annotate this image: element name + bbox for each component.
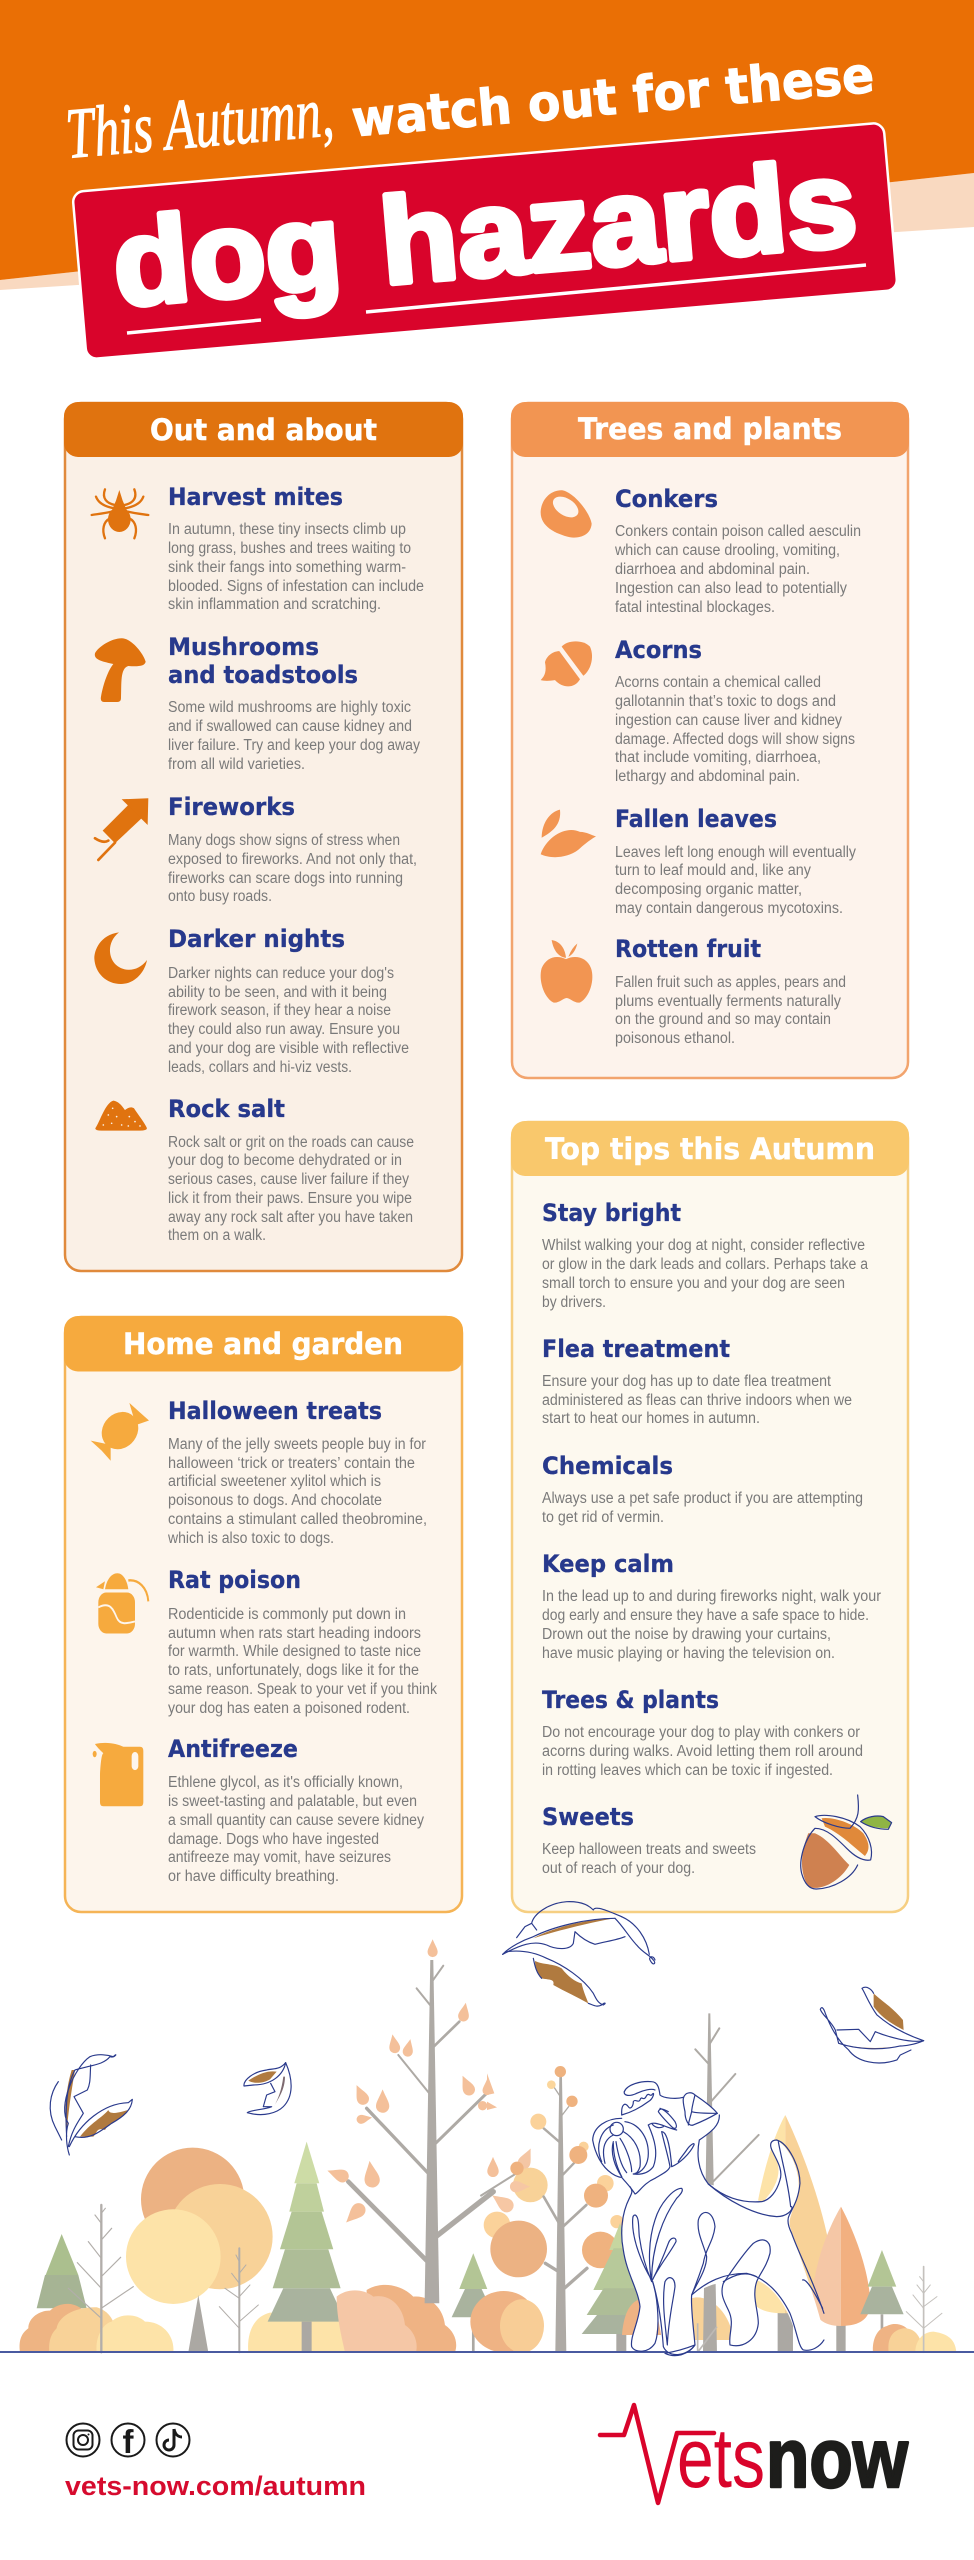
falling leaf: large top [503, 1902, 655, 2006]
body text: Rat poison: same reason. Speak to your vet if you think [168, 1681, 437, 1698]
tip: Chemicals [542, 1452, 863, 1526]
body text: Darker nights: firework season, if they hear a noise [168, 1002, 391, 1019]
body text: Halloween treats: Many of the jelly sweets people buy in for [168, 1436, 426, 1453]
banner: dog hazards: hazards [375, 134, 862, 310]
body text: Rat poison: your dog has eaten a poisoned rodent. [168, 1700, 410, 1717]
body text: Fallen leaves: Leaves left long enough will eventually [615, 844, 856, 861]
round tree [126, 2148, 273, 2352]
heading: Fireworks: Fireworks [168, 793, 295, 821]
body text: Darker nights: leads, collars and hi-viz vests. [168, 1059, 352, 1076]
logo: Vets Now: ets [677, 2411, 765, 2505]
right pine tree [860, 2250, 904, 2352]
body text: Darker nights [168, 965, 409, 1076]
tip: Keep calm: Drown out the noise by drawing your curtains, [542, 1626, 831, 1643]
heading: Rotten fruit: Rotten fruit [615, 935, 761, 963]
icon: tiktok [156, 2424, 190, 2456]
panel heading: Out and about: Out and about [150, 413, 377, 447]
icon: mushroom [95, 638, 146, 702]
icon: firework rocket [95, 798, 148, 860]
body text: Fallen leaves: may contain dangerous mycotoxins. [615, 900, 843, 917]
body text: Rotten fruit: Fallen fruit such as apples, pears and [615, 974, 846, 991]
yellow tree [750, 2115, 834, 2352]
far-left pine tree [37, 2234, 87, 2308]
body text: Rock salt: your dog to become dehydrated or in [168, 1152, 402, 1169]
body text: Fallen leaves: turn to leaf mould and, like any [615, 862, 811, 879]
logo: Vets Now [600, 2405, 909, 2505]
tip: Stay bright [542, 1199, 868, 1311]
body text: Rock salt: them on a walk. [168, 1227, 266, 1244]
item: Mushrooms and toadstools [95, 633, 420, 773]
body text: Halloween treats: artificial sweetener xylitol which is [168, 1473, 381, 1490]
right bushes [873, 2324, 956, 2352]
orange tree [812, 2207, 870, 2352]
yellow bush [248, 2313, 354, 2352]
falling leaf: small [244, 2063, 291, 2115]
tip: Trees & plants [542, 1686, 863, 1779]
body text: Mushrooms: and if swallowed can cause kidney and [168, 718, 412, 735]
footer [65, 2405, 909, 2505]
orange bush with peach bush [470, 2291, 544, 2353]
icon: antifreeze bottle [93, 1743, 143, 1806]
tip: Stay bright: or glow in the dark leads and collars. Perhaps take a [542, 1256, 868, 1273]
body text: Fallen leaves [615, 844, 856, 917]
tip: Keep calm: In the lead up to and during fireworks night, walk your [542, 1588, 881, 1605]
body text: Acorns: ingestion can cause liver and kidney [615, 712, 842, 729]
body text: Fireworks [168, 832, 417, 905]
tip: Flea treatment: Ensure your dog has up to date flea treatment [542, 1373, 832, 1390]
small pine tree [452, 2253, 495, 2352]
body text: Rat poison [168, 1606, 437, 1717]
website url: vets-now.com/autumn [65, 2471, 366, 2501]
body text: Acorns: gallotannin that’s toxic to dogs and [615, 693, 836, 710]
item: Acorns [541, 636, 855, 785]
body text: Rock salt: lick it from their paws. Ensure you wipe [168, 1190, 412, 1207]
heading: Acorns: Acorns [615, 636, 702, 664]
body text: Darker nights: Darker nights can reduce your dog's [168, 965, 394, 982]
tip: Sweets [542, 1803, 756, 1877]
panel heading: Home and garden: Home and garden [123, 1327, 403, 1361]
body text: Conkers: fatal intestinal blockages. [615, 599, 775, 616]
body text: Conkers: diarrhoea and abdominal pain. [615, 561, 810, 578]
body text: Fallen leaves: decomposing organic matter, [615, 881, 802, 898]
item: Rat poison [96, 1566, 437, 1717]
body text: Darker nights: they could also run away. Ensure you [168, 1021, 400, 1038]
item: Rock salt [95, 1095, 414, 1244]
body text: Rotten fruit: plums eventually ferments naturally [615, 993, 841, 1010]
body text: Antifreeze: Ethlene glycol, as it's officially known, [168, 1774, 403, 1791]
body text: Rotten fruit [615, 974, 846, 1047]
body text: Rotten fruit: poisonous ethanol. [615, 1030, 735, 1047]
body text: Harvest mites: In autumn, these tiny insects climb up [168, 521, 406, 538]
body text: Harvest mites: sink their fangs into something warm- [168, 559, 406, 576]
left bushes [20, 2304, 173, 2352]
item: Rotten fruit [541, 935, 846, 1047]
panel heading: Trees and plants: Trees and plants [578, 412, 842, 446]
body text: Rock salt: away any rock salt after you have taken [168, 1209, 413, 1226]
title line: This Autumn, watch out for these: watch out for these [349, 46, 876, 149]
tip: Stay bright: small torch to ensure you and your dog are seen [542, 1275, 845, 1292]
falling leaf: far left [50, 2055, 132, 2155]
icon: rock salt pile [95, 1101, 147, 1131]
body text: Harvest mites: skin inflammation and scratching. [168, 596, 381, 613]
leaves and fruit on branch [480, 2073, 548, 2277]
title line: This Autumn, watch out for these: This Autumn, [63, 71, 336, 174]
tip: Keep calm: Keep calm [542, 1550, 674, 1578]
tip: Trees & plants: in rotting leaves which can be toxic if ingested. [542, 1762, 833, 1779]
tall pine tree [268, 2142, 346, 2352]
far-right bare tree [906, 2267, 942, 2352]
body text: Rat poison: for warmth. While designed to taste nice [168, 1643, 421, 1660]
icon: crescent moon [94, 932, 147, 984]
body text: Mushrooms: liver failure. Try and keep your dog away [168, 737, 420, 754]
ground line [0, 2351, 974, 2353]
body text: Conkers: Conkers contain poison called aesculin [615, 523, 861, 540]
body text: Acorns: damage. Affected dogs will show signs [615, 731, 855, 748]
body text: Mushrooms [168, 699, 420, 773]
body text: Antifreeze: is sweet-tasting and palatable, but even [168, 1793, 417, 1810]
centre and right trees [470, 2013, 956, 2353]
banner: dog hazards [72, 123, 898, 359]
body text: Conkers [614, 523, 861, 616]
icon: apple [541, 940, 592, 1003]
item: Halloween treats [91, 1397, 427, 1547]
body text: Halloween treats: which is also toxic to dogs. [167, 1530, 334, 1547]
body text: Halloween treats [167, 1436, 427, 1547]
tip: Trees & plants: acorns during walks. Avoid letting them roll around [542, 1743, 863, 1760]
logo: Vets Now: now [766, 2411, 909, 2505]
left trees and bushes [20, 1939, 495, 2352]
tip: Keep calm: have music playing or having the television on. [542, 1645, 835, 1662]
body text: Mushrooms: from all wild varieties. [168, 756, 305, 773]
big bare tree with leaves [325, 1939, 493, 2303]
tip: Keep calm: dog early and ensure they have a safe space to hide. [542, 1607, 869, 1624]
body text: Rat poison: autumn when rats start heading indoors [168, 1625, 421, 1642]
body text: Antifreeze: antifreeze may vomit, have seizures [168, 1849, 391, 1866]
heading: Fallen leaves: Fallen leaves [615, 805, 777, 833]
body text: Antifreeze: or have difficulty breathing. [168, 1868, 339, 1885]
body text: Halloween treats: poisonous to dogs. And chocolate [168, 1492, 382, 1509]
tip: Flea treatment: administered as fleas can thrive indoors when we [542, 1392, 852, 1409]
item: Fallen leaves [541, 805, 856, 917]
title [63, 25, 898, 359]
body text: Rock salt: serious cases, cause liver failure if they [168, 1171, 409, 1188]
item: Conkers [541, 485, 861, 616]
body text: Rotten fruit: on the ground and so may contain [615, 1011, 831, 1028]
body text: Harvest mites [168, 521, 424, 613]
icon: acorn [541, 641, 592, 686]
body text: Rat poison: Rodenticide is commonly put down in [168, 1606, 406, 1623]
body text: Antifreeze [168, 1774, 424, 1885]
heading: Antifreeze: Antifreeze [168, 1735, 298, 1763]
heading: Harvest mites: Harvest mites [168, 483, 343, 511]
tip: Stay bright: Stay bright [542, 1199, 681, 1227]
body text: Rock salt [168, 1134, 414, 1244]
icon: harvest mite [92, 489, 148, 538]
body text: Rat poison: to rats, unfortunately, dogs like it for the [168, 1662, 419, 1679]
tip: Flea treatment [542, 1335, 852, 1427]
heading: Rock salt: Rock salt [168, 1095, 285, 1123]
body text: Harvest mites: long grass, bushes and trees waiting to [168, 540, 411, 557]
body text: Antifreeze: a small quantity can cause severe kidney [168, 1812, 424, 1829]
body text: Harvest mites: blooded. Signs of infestation can include [168, 578, 424, 595]
body text: Acorns: lethargy and abdominal pain. [615, 768, 800, 785]
panel: Trees and plants [511, 402, 909, 1078]
tip: Sweets: out of reach of your dog. [542, 1860, 695, 1877]
body text: Acorns: Acorns contain a chemical called [615, 674, 821, 691]
icon: instagram [66, 2424, 100, 2456]
tip: Flea treatment: start to heat our homes in autumn. [542, 1410, 760, 1427]
body text: Darker nights: ability to be seen, and with it being [168, 984, 387, 1001]
item: Harvest mites [92, 483, 424, 613]
centre bare tree with round fruit [530, 2066, 624, 2352]
heading: Conkers: Conkers [615, 485, 718, 513]
tip: Stay bright: Whilst walking your dog at night, consider reflective [542, 1237, 865, 1254]
body text: Mushrooms: Some wild mushrooms are highly toxic [168, 699, 411, 716]
body text: Acorns: that include vomiting, diarrhoea, [615, 749, 821, 766]
falling leaf: right [820, 1987, 924, 2063]
body text: Conkers: Ingestion can also lead to potentially [615, 580, 847, 597]
tip: Trees & plants: Trees & plants [542, 1686, 719, 1714]
body text: Fireworks: exposed to fireworks. And not only that, [168, 851, 417, 868]
item: Darker nights [94, 925, 409, 1076]
body text: Darker nights: and your dog are visible with reflective [168, 1040, 409, 1057]
heading: Mushrooms and toadstools: Mushrooms [168, 633, 319, 661]
large orange bush [337, 2285, 456, 2352]
item: Fireworks [95, 793, 417, 905]
heading: Mushrooms and toadstools: and toadstools [168, 661, 358, 689]
tip: Chemicals: Chemicals [542, 1452, 673, 1480]
header background [0, 0, 974, 290]
body text: Acorns [615, 674, 855, 785]
social icons [66, 2423, 190, 2460]
tip: Stay bright: by drivers. [542, 1294, 606, 1311]
banner: dog hazards: dog [108, 177, 346, 332]
heading: Darker nights: Darker nights [168, 925, 345, 953]
heading: Rat poison: Rat poison [168, 1566, 301, 1594]
tip: Flea treatment: Flea treatment [542, 1335, 730, 1363]
autumn landscape [0, 1902, 974, 2356]
body text: Conkers: which can cause drooling, vomiting, [614, 542, 840, 559]
body text: Fireworks: onto busy roads. [168, 888, 272, 905]
icon: acorn illustration [801, 1795, 892, 1889]
body text: Halloween treats: contains a stimulant called theobromine, [168, 1511, 427, 1528]
icon: wrapped sweet [91, 1403, 149, 1461]
tip: Sweets: Sweets [542, 1803, 634, 1831]
dog line drawing [593, 2081, 824, 2356]
tip: Chemicals: Always use a pet safe product if you are attempting [542, 1490, 863, 1507]
item: Antifreeze [93, 1735, 424, 1885]
bare tree behind dog [695, 2013, 759, 2352]
icon: rat poison bottle [96, 1573, 148, 1633]
title line: This Autumn, watch out for these [63, 25, 876, 174]
heading: Mushrooms and toadstools [168, 633, 358, 689]
panel: Top tips this Autumn [511, 1121, 909, 1912]
body text: Halloween treats: halloween ‘trick or treaters’ contain the [168, 1455, 415, 1472]
panel: Out and about [64, 402, 463, 1271]
icon: facebook: f [122, 2423, 134, 2460]
left bare tree [68, 2205, 133, 2352]
bush behind dog [622, 2297, 733, 2340]
body text: Fireworks: fireworks can scare dogs into running [168, 870, 403, 887]
tip: Chemicals: to get rid of vermin. [542, 1509, 664, 1526]
body text: Antifreeze: damage. Dogs who have ingested [168, 1831, 379, 1848]
body text: Fireworks: Many dogs show signs of stress when [168, 832, 400, 849]
tip: Trees & plants: Do not encourage your dog to play with conkers or [542, 1724, 860, 1741]
tip: Sweets: Keep halloween treats and sweets [542, 1841, 756, 1858]
pine behind dog [582, 2223, 660, 2352]
tip: Keep calm [542, 1550, 881, 1662]
body text: Rock salt: Rock salt or grit on the roads can cause [168, 1134, 414, 1151]
panel heading: Top tips this Autumn: Top tips this Autumn [545, 1132, 875, 1166]
icon: conker [541, 490, 592, 538]
small bare tree [219, 2248, 258, 2352]
icon: fallen leaves [541, 810, 596, 857]
heading: Halloween treats: Halloween treats [168, 1397, 382, 1425]
panel: Home and garden [64, 1316, 463, 1912]
